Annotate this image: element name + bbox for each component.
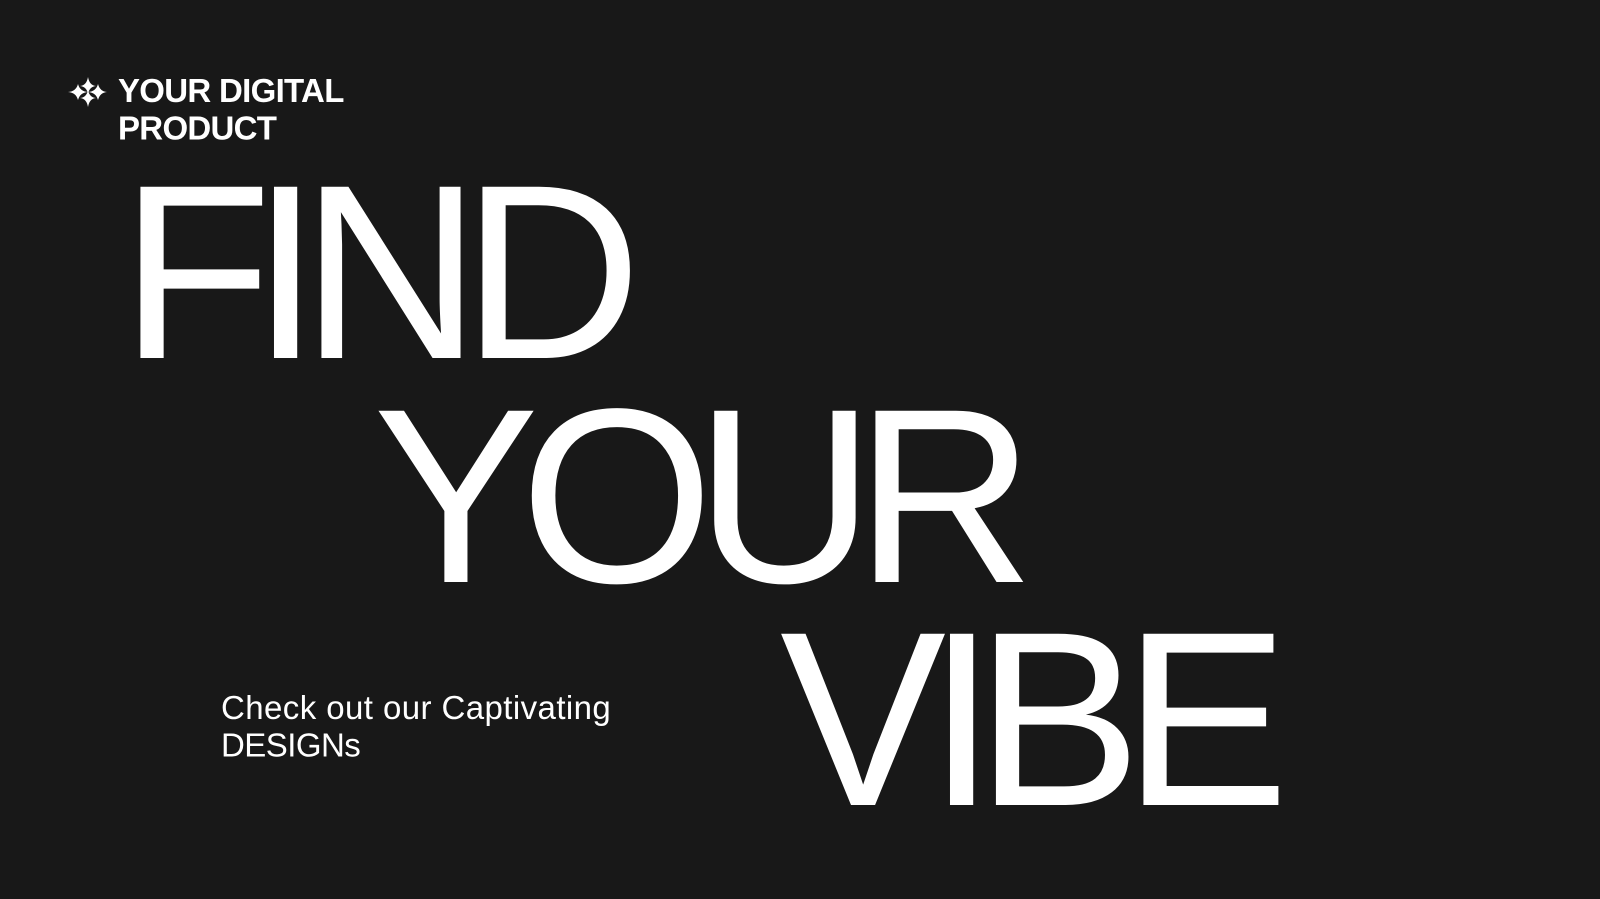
headline line: VIBE: VIBE — [780, 580, 1289, 858]
icon: sparkle stars — [68, 77, 107, 107]
brand label — [118, 72, 344, 146]
headline line: FIND: FIND — [120, 133, 642, 411]
subtitle: Check out our Captivating — [221, 689, 611, 726]
headline line: YOUR: YOUR — [373, 357, 1035, 635]
brand label: YOUR DIGITAL — [118, 72, 344, 109]
subtitle — [221, 689, 611, 764]
subtitle: DESIGNs — [221, 726, 360, 764]
headline — [120, 133, 1289, 858]
brand label: PRODUCT — [118, 110, 277, 146]
